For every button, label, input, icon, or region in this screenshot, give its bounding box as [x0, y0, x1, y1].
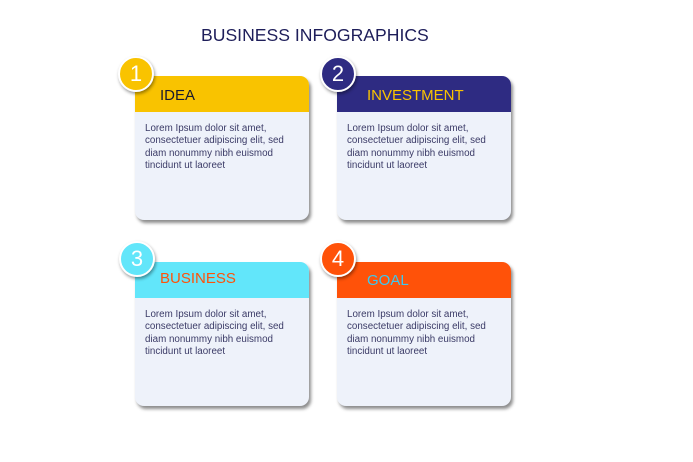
header: idea: IDEA	[160, 87, 195, 104]
title: BUSINESS INFOGRAPHICS	[201, 25, 429, 45]
badge 2	[320, 56, 356, 92]
badge 4: 4	[332, 246, 344, 271]
text: business: Lorem Ipsum dolor sit amet,	[145, 309, 266, 320]
badge 1	[118, 56, 154, 92]
text: investment	[347, 123, 486, 171]
text: idea: tincidunt ut laoreet	[145, 160, 225, 171]
header: goal: GOAL	[367, 272, 409, 289]
header: idea	[135, 76, 309, 112]
text: business: tincidunt ut laoreet	[145, 346, 225, 357]
badge 2: 2	[332, 61, 344, 86]
text: business: diam nonummy nibh euismod	[145, 334, 273, 345]
panel: goal	[337, 262, 511, 406]
text: investment: Lorem Ipsum dolor sit amet,	[347, 123, 468, 134]
panel: business	[135, 262, 309, 406]
header: business: BUSINESS	[160, 270, 236, 287]
text: idea: Lorem Ipsum dolor sit amet,	[145, 123, 266, 134]
header: business	[135, 262, 309, 298]
text: business	[145, 309, 284, 357]
text: goal	[347, 309, 486, 357]
text: goal: diam nonummy nibh euismod	[347, 334, 475, 345]
text: goal: consectetuer adipiscing elit, sed	[347, 321, 486, 332]
text: idea: diam nonummy nibh euismod	[145, 148, 273, 159]
header: goal	[337, 262, 511, 298]
text: business: consectetuer adipiscing elit, sed	[145, 321, 284, 332]
text: investment: tincidunt ut laoreet	[347, 160, 427, 171]
badge 3	[119, 241, 155, 277]
badge 3: 3	[131, 246, 143, 271]
text: goal: Lorem Ipsum dolor sit amet,	[347, 309, 468, 320]
badge 4	[320, 241, 356, 277]
text: investment: diam nonummy nibh euismod	[347, 148, 475, 159]
text: idea: consectetuer adipiscing elit, sed	[145, 135, 284, 146]
panel: idea	[135, 76, 309, 220]
badge 1: 1	[130, 61, 142, 86]
header: investment	[337, 76, 511, 112]
header: investment: INVESTMENT	[367, 87, 464, 104]
text: goal: tincidunt ut laoreet	[347, 346, 427, 357]
text: investment: consectetuer adipiscing elit, sed	[347, 135, 486, 146]
text: idea	[145, 123, 284, 171]
panel: investment	[337, 76, 511, 220]
